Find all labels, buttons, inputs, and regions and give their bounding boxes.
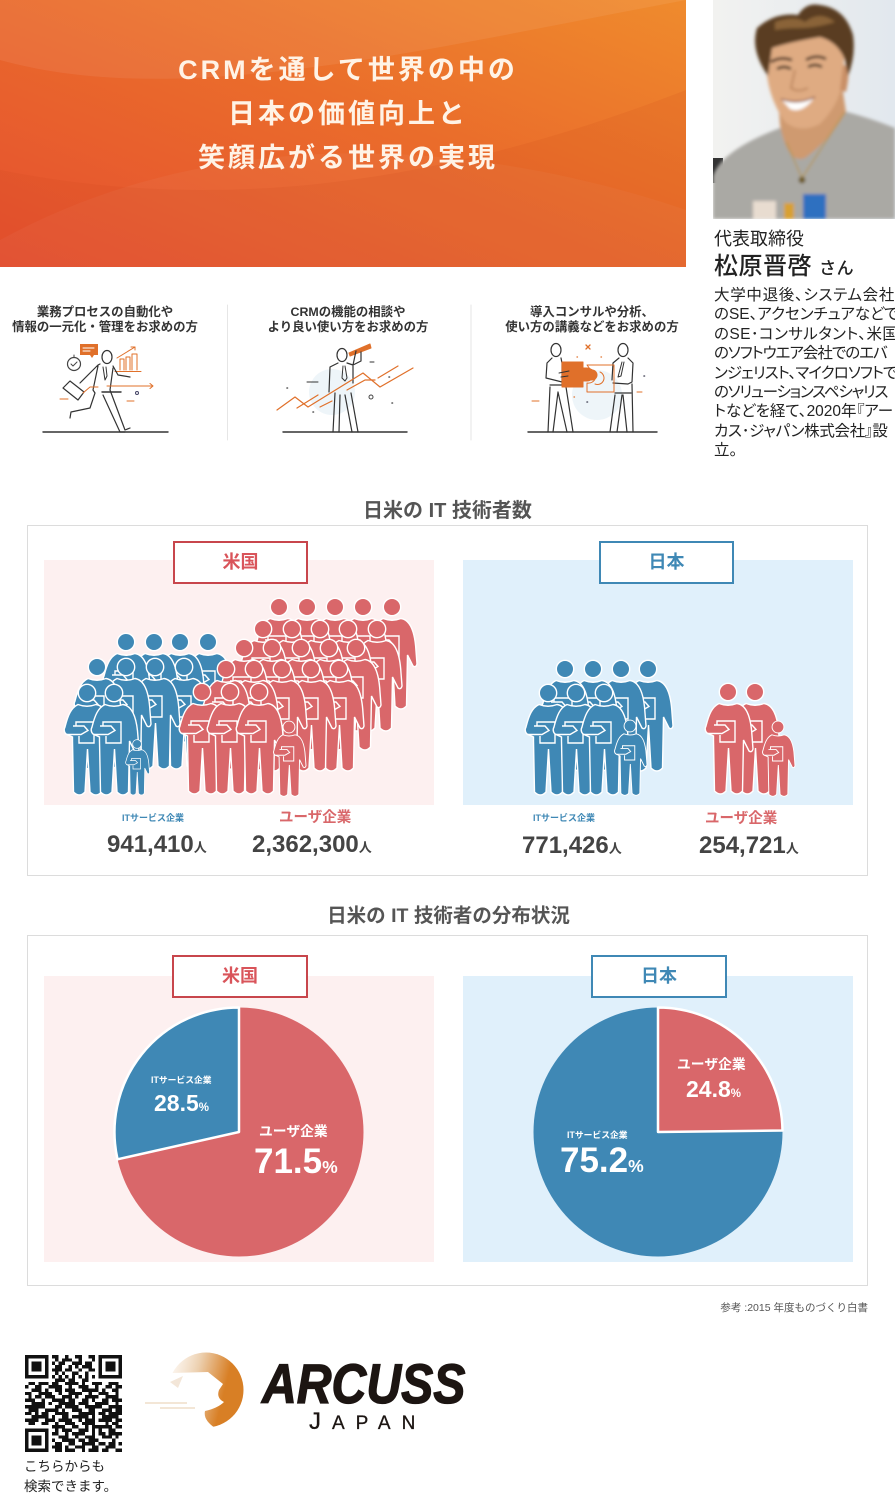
presenter biography: 立。 xyxy=(714,442,737,459)
pie label: US user xyxy=(254,1124,338,1181)
ARCUSS: ARCUSS xyxy=(262,1352,465,1415)
hero title xyxy=(178,55,518,173)
service heading 2 xyxy=(268,305,428,334)
pie: US xyxy=(114,1008,364,1256)
presenter biography: ンジェリスト、マイクロソフトで xyxy=(714,365,895,382)
label: US xyxy=(172,955,308,998)
Japan user company people xyxy=(705,683,795,796)
panel background: US pie xyxy=(44,976,434,1262)
stat label: ユーザ企業 xyxy=(279,810,351,826)
QR caption: こちらからも xyxy=(24,1459,105,1474)
logo: wordmark xyxy=(260,1352,466,1435)
name: ITサービス企業 xyxy=(151,1075,212,1085)
QR caption: 検索できます。 xyxy=(24,1478,117,1494)
service heading 1: 情報の一元化・管理をお求めの方 xyxy=(12,320,198,334)
QR code xyxy=(25,1355,122,1452)
pie: Japan xyxy=(534,1008,782,1256)
presenter biography: 大学中退後、システム会社 xyxy=(714,287,895,304)
source note: 参考 :2015 年度ものづくり白書 xyxy=(720,1302,868,1314)
QR caption xyxy=(24,1459,117,1494)
logo: tiger emblem xyxy=(145,1352,244,1427)
presenter biography: のSE、アクセンチュアなどで xyxy=(714,306,895,323)
icon: two men with puzzle xyxy=(528,344,657,432)
percentage: 71.5% xyxy=(254,1142,338,1181)
US user company people xyxy=(179,598,417,796)
label: Japan: 日本 xyxy=(641,966,677,986)
stat value: 2,362,300人 xyxy=(252,831,372,858)
label: Japan xyxy=(599,541,734,584)
presenter biography: カス･ジャパン株式会社』設 xyxy=(714,423,888,440)
presenter biography: のSE･コンサルタント、米国 xyxy=(714,326,895,343)
stat: US IT service xyxy=(107,813,207,858)
heading: engineer count: 日米の IT 技術者数 xyxy=(363,500,532,522)
panel background: US count xyxy=(44,560,434,805)
service heading 2: CRMの機能の相談や xyxy=(291,305,405,319)
pie charts xyxy=(113,1006,784,1256)
panel: distribution xyxy=(27,935,868,1286)
name: ユーザ企業 xyxy=(677,1057,746,1072)
service heading 3 xyxy=(505,305,679,334)
hero title: 笑顔広がる世界の実現 xyxy=(198,143,498,173)
stat label: ITサービス企業 xyxy=(122,813,184,823)
service heading 1: 業務プロセスの自動化や xyxy=(37,305,173,319)
service heading 1 xyxy=(12,305,198,334)
pie label: US IT xyxy=(151,1075,212,1116)
percentage: 24.8% xyxy=(686,1076,741,1102)
presenter name: 松原晋啓 さん xyxy=(714,253,854,280)
presenter biography: のソフトウエア会社でのエバ xyxy=(714,345,887,362)
pie label: Japan user xyxy=(677,1057,746,1102)
label: Japan xyxy=(591,955,727,998)
panel background: Japan pie xyxy=(463,976,853,1262)
panel: engineer count xyxy=(27,525,868,876)
service heading 2: より良い使い方をお求めの方 xyxy=(268,320,428,334)
hero title: 日本の価値向上と xyxy=(228,99,468,129)
stat value: 941,410人 xyxy=(107,831,207,858)
name: ユーザ企業 xyxy=(259,1124,328,1139)
name: ITサービス企業 xyxy=(567,1130,628,1140)
percentage: 75.2% xyxy=(560,1141,644,1180)
JAPAN: JAPAN xyxy=(309,1408,426,1435)
percentage: 28.5% xyxy=(154,1090,209,1116)
label: US: 米国 xyxy=(222,552,258,572)
Japan IT service people xyxy=(525,660,673,795)
presenter title: 代表取締役 xyxy=(714,229,804,249)
icon: running businessman xyxy=(43,344,168,432)
presenter biography xyxy=(714,286,895,459)
presenter biography: のソリューションスペシャリス xyxy=(714,384,887,401)
label: US xyxy=(173,541,308,584)
US IT service people xyxy=(64,633,233,795)
stat: Japan user xyxy=(699,810,799,859)
stat value: 771,426人 xyxy=(522,832,622,859)
service heading 3: 使い方の講義などをお求めの方 xyxy=(505,320,679,334)
hero banner xyxy=(0,0,686,267)
panel background: Japan count xyxy=(463,560,853,805)
service heading 3: 導入コンサルや分析、 xyxy=(530,305,654,319)
stat value: 254,721人 xyxy=(699,832,799,859)
label: Japan: 日本 xyxy=(648,552,684,572)
label: US: 米国 xyxy=(222,966,258,986)
people pictograms xyxy=(64,598,796,797)
stat: US user xyxy=(252,809,372,858)
icon: man with telescope xyxy=(277,344,413,432)
heading: distribution: 日米の IT 技術者の分布状況 xyxy=(327,905,570,927)
presenter biography: トなどを経て、2020年『アー xyxy=(714,403,893,420)
portrait photo xyxy=(713,0,895,219)
stat label: ユーザ企業 xyxy=(705,811,777,827)
hero title: CRMを通して世界の中の xyxy=(178,55,518,85)
stat label: ITサービス企業 xyxy=(533,813,595,823)
stat: Japan IT service xyxy=(522,813,622,859)
service illustrations xyxy=(42,304,658,440)
pie label: Japan IT xyxy=(560,1130,644,1180)
